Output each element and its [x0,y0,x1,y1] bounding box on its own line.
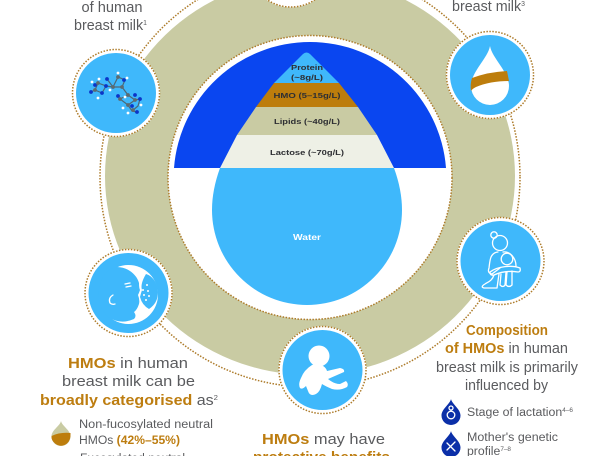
blue semicircle backdrop [174,42,446,168]
band: lactose: Lactose (~70g/L) [270,148,345,157]
icon: DNA drop [442,431,460,456]
icon: mother drop [442,399,460,425]
band: protein: Protein [291,63,323,72]
text: top left caption: 1 [143,20,147,27]
icon: baby bubble [278,326,366,414]
text: HMO categories heading: broadly categorised as [40,393,212,409]
icon: two-tone drop [51,421,71,446]
icon: breastfeeding bubble [84,249,172,337]
band: HMO [256,83,358,107]
band: lipids: Lipids (~40g/L) [274,117,341,126]
legend: non-fucosylated neutral HMOs: Non-fucosylated neutral [79,419,213,431]
text: HMO categories heading [40,356,218,409]
text: HMO categories heading: HMOs in human [68,356,188,372]
list item: stage of lactation: Stage of lactation [467,407,556,419]
icon: molecule bubble [72,49,160,137]
water drop [212,168,402,305]
band: lactose [220,135,394,168]
top circle (cropped) [248,0,334,8]
band: lipids [237,107,377,135]
text: composition heading [436,323,579,394]
text: composition heading: breast milk is primarily [436,360,579,376]
list item: genetic profile: Mother's genetic [467,432,558,444]
list item: stage of lactation: 4–6 [562,408,574,414]
text: composition heading: of HMOs in human [445,341,568,357]
icon: mother and child bubble [456,217,544,305]
text: composition heading: influenced by [465,378,549,394]
legend: non-fucosylated neutral HMOs: HMOs (42%–55%) [79,435,180,447]
band: protein [274,52,339,83]
list item: genetic profile [442,431,558,456]
list item: genetic profile: 7–8 [500,447,512,453]
text: top left caption: breast milk [74,18,144,34]
text: HMO categories heading: 2 [214,395,218,402]
text: protective benefits heading [253,432,390,456]
text: top left caption: of human [82,0,142,16]
text: protective benefits heading: HMOs may have [262,432,385,448]
text: composition heading: Composition [466,323,548,339]
chart: breast milk composition [174,42,446,305]
list item: stage of lactation [442,399,574,425]
text: HMO categories heading: breast milk can be [62,374,195,390]
band: protein: (~8g/L) [291,73,324,82]
outer ring [100,0,520,387]
icon: milk drop bubble [446,31,534,119]
text: top right caption: 3 [521,1,525,8]
band: HMO: HMO (5–15g/L) [274,91,341,100]
text: top left caption [74,0,147,34]
molecule atoms [89,77,142,114]
molecule bonds [91,77,140,112]
water drop: Water [293,232,322,242]
legend: non-fucosylated neutral HMOs [51,419,213,447]
